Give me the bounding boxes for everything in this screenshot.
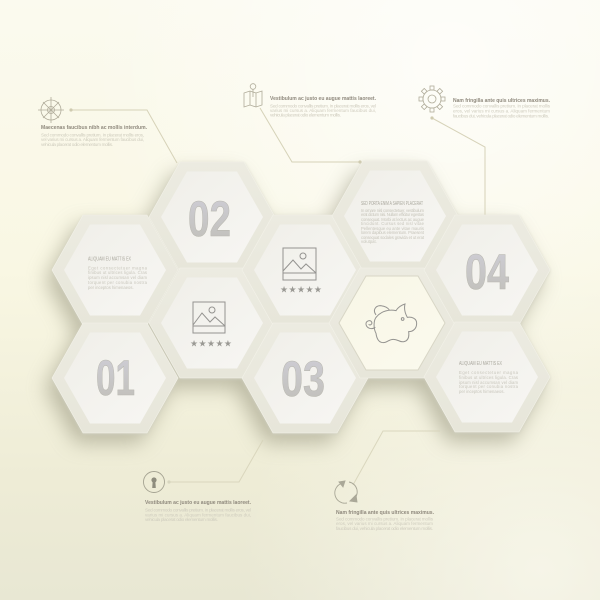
icon: piggy bank [366, 304, 417, 343]
connector: refresh to bottom right hexagon [353, 431, 440, 485]
text block: bottom right: eros, vel varius mi cursus a. Aliquam fermentum [336, 521, 433, 526]
panel: text hexagon left [52, 215, 178, 325]
icon: map with pin [244, 84, 262, 107]
text block: top right [453, 98, 551, 118]
hexagon paragraph: lorem dapibus elementum. Praesent [361, 230, 425, 235]
hexagon paragraph: ipsum nisl accumsan vel diam [459, 380, 518, 385]
hexagon paragraph: Eget consectetuer magna [88, 266, 148, 270]
text block: top right: eros, vel varius mi cursus a. Aliquam fermentum [453, 108, 550, 114]
hexagon paragraph: erat dictum nisi. Nullam efficitur egestas [361, 212, 424, 217]
text block: top left [41, 125, 147, 147]
icon: gear [419, 86, 445, 112]
text block: top left: vehicula placerat odio elementum mollis. [41, 142, 113, 147]
hexagon heading: ALIQUAM EU MATTIS EX [459, 361, 502, 367]
hexagon paragraph: per inceptos himenaeos. [459, 389, 505, 394]
hexagon paragraph: torquent per conubia nostra [459, 384, 519, 389]
number 03: 03 [281, 351, 325, 407]
hexagon paragraph: In ornare nisl consectetuer, vestibulum [361, 208, 424, 213]
hexagon paragraph: Pellentesque eu ante vitae mauris [361, 226, 424, 231]
hexagon paragraph: consequat. Morbi at lectus ac augue [361, 217, 425, 222]
hexagon joint shading [52, 162, 550, 434]
number 04: 04 [465, 244, 509, 300]
icon: refresh arrows [335, 481, 357, 503]
text block: top centre: vehicula placerat odio elementum mollis. [270, 112, 341, 118]
hexagon paragraph [88, 266, 148, 290]
panel: hexagon 04 [424, 215, 550, 325]
hexagon paragraph: tincidunt. Cursus sed nisl vitae [361, 221, 425, 226]
hexagon paragraph [361, 208, 425, 244]
panel: hexagon 03 [242, 323, 368, 433]
text block: bottom left: varius mi cursus a. Aliquam fermentum faucibus dui, [145, 512, 251, 518]
text block: bottom right [336, 510, 434, 531]
hexagon heading: SED PORTA ENIM A SAPIEN PLACERAT [361, 201, 423, 207]
text block: top right: Nam fringilla ante quis ultrices maximus. [453, 98, 550, 104]
connector: map to top hexagon [260, 108, 362, 164]
text block: bottom right: Sed commodo convallis pretium. In placerat mollis [336, 516, 434, 522]
hexagon heading: ALIQUAM EU MATTIS EX [88, 256, 131, 262]
text block: top left: vel varius mi cursus a. Aliquam fermentum faucibus dui, [41, 137, 144, 142]
number 01: 01 [96, 350, 135, 406]
icon: keyhole [144, 472, 164, 492]
panel: piggy bank hexagon [329, 268, 455, 378]
connector: helm to hexagon 02 [69, 108, 177, 163]
rating stars: ★★★★★ [190, 340, 232, 350]
text block: bottom left [145, 500, 251, 522]
text block: top centre [270, 96, 376, 118]
text block: top centre: varius mi cursus a. Aliquam fermentum faucibus dui, [270, 108, 376, 113]
hexagon paragraph: per inceptos himenaeos. [88, 285, 134, 290]
text block: bottom left: Sed commodo convallis pretium. In placerat mollis eros, vel [145, 508, 251, 512]
text block: top centre: Sed commodo convallis pretium. In placerat mollis eros, vel [270, 104, 376, 108]
connector: gear to hexagon 04 [430, 116, 485, 218]
panel: image hexagon left [149, 268, 275, 378]
hexagon paragraph: finibus ut ultrices ligula. Cras [88, 270, 147, 275]
icon: picture [193, 302, 225, 333]
icon: picture [283, 248, 316, 280]
text block: bottom right: Nam fringilla ante quis ultrices maximus. [336, 510, 434, 516]
hexagon paragraph: torquent per conubia nostra [88, 280, 148, 285]
hexagon paragraph: consequat sodales gravida et ut erat [361, 235, 425, 240]
connector: keyhole to hexagon 03 [167, 440, 263, 484]
hexagon paragraph [459, 370, 519, 394]
panel: hexagon 02 [149, 162, 275, 272]
panel: text hexagon top [332, 161, 458, 271]
text block: top left: Sed commodo convallis pretium. In placerat mollis eros, [41, 132, 144, 138]
text block: top centre: Vestibulum ac justo eu augue mattis laoreet. [270, 96, 376, 102]
hexagon paragraph: volutpat. [361, 239, 377, 244]
panel: hexagon 01 [52, 323, 178, 433]
text block: bottom left: Vestibulum ac justo eu augue mattis laoreet. [145, 500, 251, 506]
panel: text hexagon bottom right [424, 322, 550, 432]
hexagon paragraph: Eget consectetuer magna [459, 370, 519, 375]
number 02: 02 [188, 191, 231, 247]
hexagon paragraph: finibus ut ultrices ligula. Cras [459, 375, 518, 380]
rating stars: ★★★★★ [280, 286, 322, 296]
text block: top right: Sed commodo convallis pretium. In placerat mollis [453, 104, 551, 108]
text block: top right: faucibus dui, vehicula placerat odio elementum mollis. [453, 114, 549, 118]
icon: ship wheel [38, 97, 64, 123]
panel: image hexagon centre [242, 215, 368, 325]
hexagon paragraph: ipsum nisl accumsan vel diam [88, 275, 148, 280]
text block: top left: Maecenas faucibus nibh ac mollis interdum. [41, 125, 147, 131]
text block: bottom right: faucibus dui, vehicula placerat odio elementum mollis. [336, 526, 433, 531]
text block: bottom left: vehicula placerat odio elementum mollis. [145, 517, 218, 522]
hexagon shadows [45, 172, 543, 443]
